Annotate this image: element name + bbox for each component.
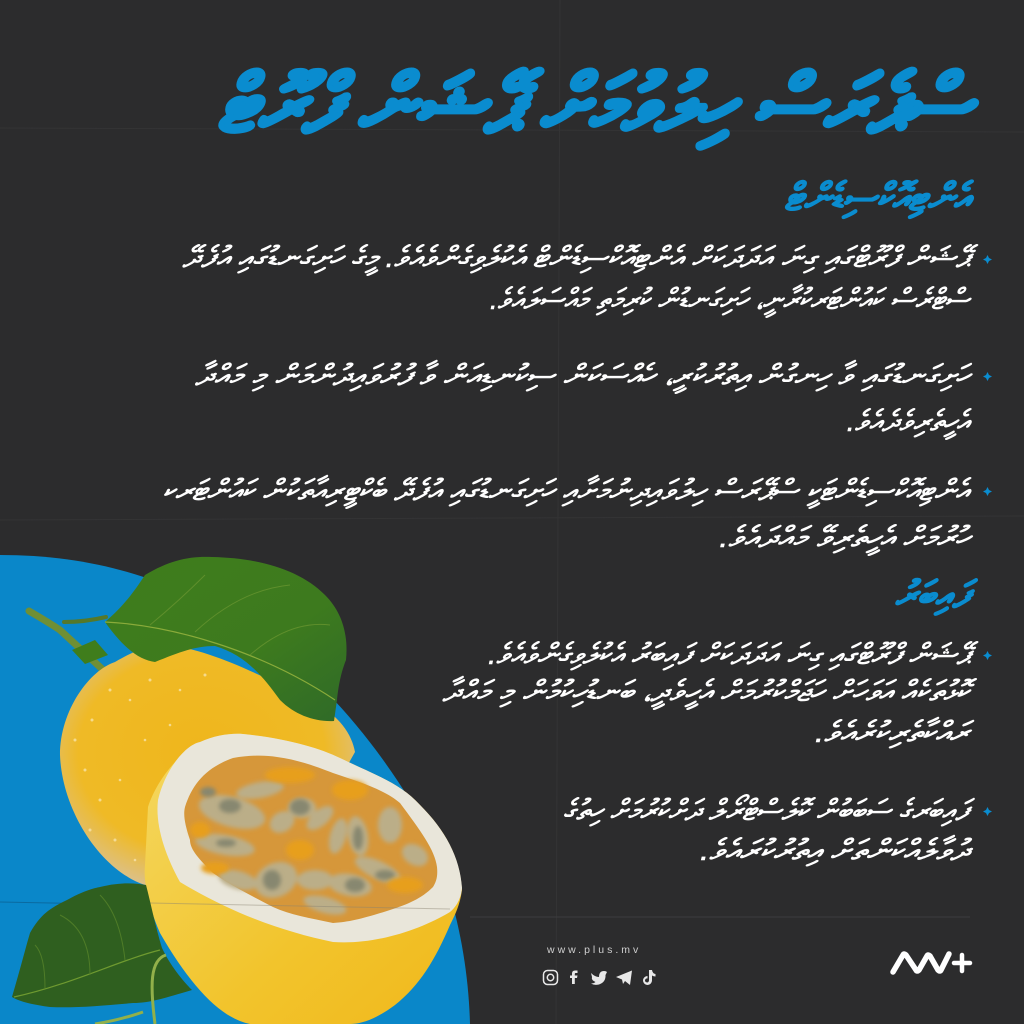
bullet text line: ދުވާލެއްކަންތަށް އިތުރުކުރައެވެ.	[700, 835, 969, 867]
bullet text line: ފައިބަރގެ ސަބަބުން ކޮލެސްޓްރޯލް ދަށްކުރުމަށް ހިތުގެ	[563, 795, 969, 827]
lower leaf	[12, 883, 192, 1007]
bullet text line: ޕޭޝަން ފްރޫޓްގައި ގިނަ އަދަދަކަށް އެންޓިއޮކްސިޑެންޓް އެކުލެވިގެންވެއެވެ. މީގެ ހަށިގަނޑުގައި އުފެދޭ	[183, 242, 969, 274]
stem	[29, 611, 114, 680]
bullet list: antioxidants	[163, 242, 992, 556]
fruit speckles	[74, 674, 206, 861]
title: ސްޕެރަސް ހިލުވުމަށް ޕޭޝަން ފްރޫޓް	[218, 59, 971, 148]
bullet text line: ރައްކާތެރިކުރެއެވެ.	[815, 717, 969, 749]
bullet	[983, 807, 992, 816]
bullet	[983, 487, 992, 496]
tendril	[95, 955, 166, 1024]
icon: tiktok	[643, 970, 656, 985]
bullet text line: ހުރުމަށް އެހީތެރިވޭ މައްދައެވެ.	[719, 522, 969, 554]
icon: twitter	[591, 971, 607, 985]
bullet text line: ކޮޅުތަކެއް އަވަހަށް ހަޖަމްކުރުމަށް އެހީވެދީ، ބަނޑުހިކުމުން މި މައްދާ	[443, 676, 969, 708]
bullet text line: އެންޓިއޮކްސިޑެންޓަކީ ސްޕޭރަސް ހިލުވައިދިނުމަށާއި ހަށިގަނޑުގައި އުފެދޭ ބެކްޓީރިއާތަކުން ކައުންޓަރކ	[163, 475, 969, 507]
bullet text line: ސްޓްރެސް ކައުންޓަރކުރާނީ، ހަށިގަނޑުން ކުރިމަތި މައްސަލައެވެ.	[489, 284, 969, 316]
bullet text line: ޕޭޝަން ފްރޫޓްގައި ގިނަ އަދަދަކަށް ފައިބަރު އެކުލެވިގެންވެއެވެ.	[488, 639, 969, 671]
whole fruit	[60, 645, 355, 885]
blue shape	[0, 555, 470, 1024]
icon: facebook	[570, 970, 578, 984]
footer: website: www.plus.mv	[547, 944, 641, 956]
heading: fibre: ފައިބަރު	[895, 574, 970, 615]
icon: telegram	[616, 970, 632, 985]
top leaf	[72, 557, 347, 721]
bullet	[983, 255, 992, 264]
bullet text line: ހަށިގަނޑުގައި ވާ ހިނގުން އިތުރުކުރީ، ހެއްސަކަން ސިކުނޑިއަން ވާ ފުރުވައިދުންމަން މި މައްދާ	[195, 360, 969, 392]
bullet text line: އެހީތެރިވެދެއެވެ.	[847, 406, 969, 438]
seeds	[194, 778, 432, 918]
cut fruit	[145, 734, 462, 1024]
heading: antioxidants: އެންޓިއޮކްސިޑެންޓް	[784, 177, 970, 219]
bullet	[983, 651, 992, 660]
bullet list: fibre	[442, 639, 992, 867]
icon: instagram	[544, 970, 558, 984]
bullet	[983, 372, 992, 381]
